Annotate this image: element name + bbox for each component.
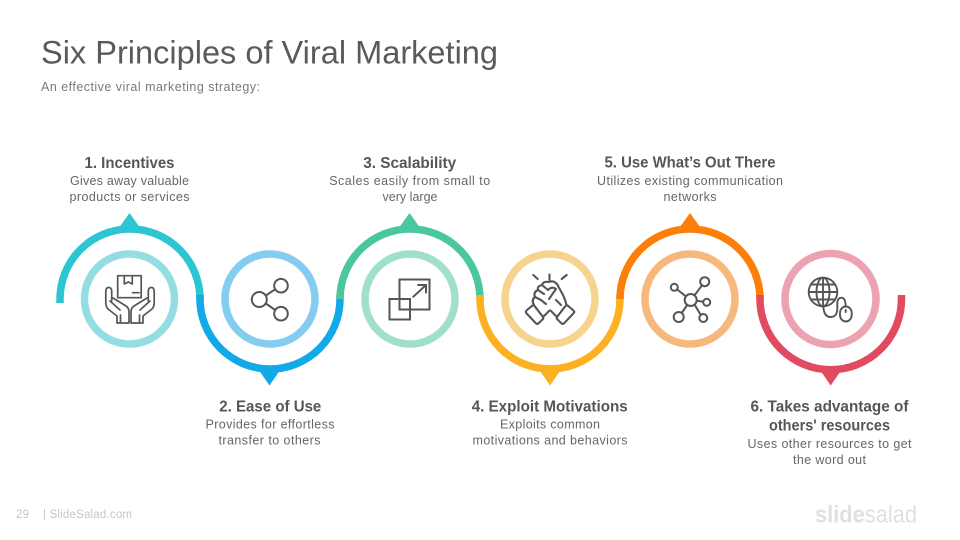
description: takes advantage: the word out bbox=[793, 453, 867, 467]
description: incentives: products or services bbox=[70, 190, 190, 204]
heading: takes advantage of others' resources bbox=[750, 398, 909, 434]
heading: takes advantage of others' resources: others' resources bbox=[769, 418, 890, 434]
heading: ease of use: 2. Ease of Use bbox=[219, 398, 322, 416]
ring bbox=[225, 254, 315, 344]
description: use what's out there bbox=[597, 174, 783, 204]
heading: exploit motivations: 4. Exploit Motivations bbox=[472, 398, 628, 416]
panel: step 4 exploit motivations bbox=[472, 254, 628, 448]
icon: share nodes bbox=[252, 279, 288, 321]
description: incentives: Gives away valuable bbox=[70, 174, 189, 188]
ring bbox=[84, 254, 174, 344]
description: incentives bbox=[70, 174, 190, 204]
panel: step 1 incentives bbox=[60, 155, 200, 344]
ring bbox=[785, 254, 876, 344]
icon: clasped hands bbox=[526, 274, 574, 324]
arc with bottom pointer bbox=[760, 295, 902, 386]
footer site label: | SlideSalad.com bbox=[43, 509, 132, 521]
heading: use what's out there: 5. Use What’s Out There bbox=[604, 154, 776, 172]
icon: network hub bbox=[671, 277, 710, 322]
description: scalability: Scales easily from small to bbox=[329, 174, 490, 188]
panel: step 2 ease of use bbox=[200, 254, 340, 448]
description: takes advantage bbox=[748, 437, 912, 467]
page number: 29 bbox=[16, 509, 29, 521]
arc with top pointer bbox=[620, 213, 760, 299]
description: ease of use bbox=[206, 418, 334, 448]
icon: globe and mouse bbox=[809, 278, 852, 322]
description: exploit motivations: motivations and behaviors bbox=[472, 434, 628, 448]
arc with top pointer bbox=[340, 213, 480, 299]
description: exploit motivations bbox=[472, 418, 628, 448]
heading: scalability: 3. Scalability bbox=[363, 155, 457, 172]
arc with top pointer bbox=[60, 213, 200, 303]
ring bbox=[365, 254, 455, 344]
panel: step 3 scalability bbox=[329, 155, 490, 344]
logo wordmark: slidesalad bbox=[815, 502, 917, 528]
arc with bottom pointer bbox=[200, 295, 340, 386]
description: scalability bbox=[329, 174, 490, 204]
subtitle: An effective viral marketing strategy: bbox=[41, 80, 260, 94]
panel: step 5 use what's out there bbox=[597, 154, 783, 344]
icon: scaling squares bbox=[390, 280, 430, 320]
description: use what's out there: networks bbox=[664, 190, 716, 204]
heading: incentives: 1. Incentives bbox=[84, 155, 174, 172]
description: ease of use: Provides for effortless bbox=[206, 418, 334, 432]
icon: hands holding box bbox=[106, 276, 154, 323]
title: Six Principles of Viral Marketing bbox=[41, 34, 498, 70]
description: exploit motivations: Exploits common bbox=[500, 418, 600, 432]
description: scalability: very large bbox=[382, 190, 438, 204]
arc with bottom pointer bbox=[480, 295, 620, 386]
ring bbox=[645, 254, 735, 344]
heading: takes advantage of others' resources: 6. Takes advantage of bbox=[750, 398, 909, 416]
description: ease of use: transfer to others bbox=[218, 434, 320, 448]
description: takes advantage: Uses other resources to get bbox=[748, 437, 912, 451]
description: use what's out there: Utilizes existing communication bbox=[597, 174, 783, 188]
panel: step 6 takes advantage of others' resources bbox=[748, 254, 912, 467]
ring bbox=[505, 254, 595, 344]
